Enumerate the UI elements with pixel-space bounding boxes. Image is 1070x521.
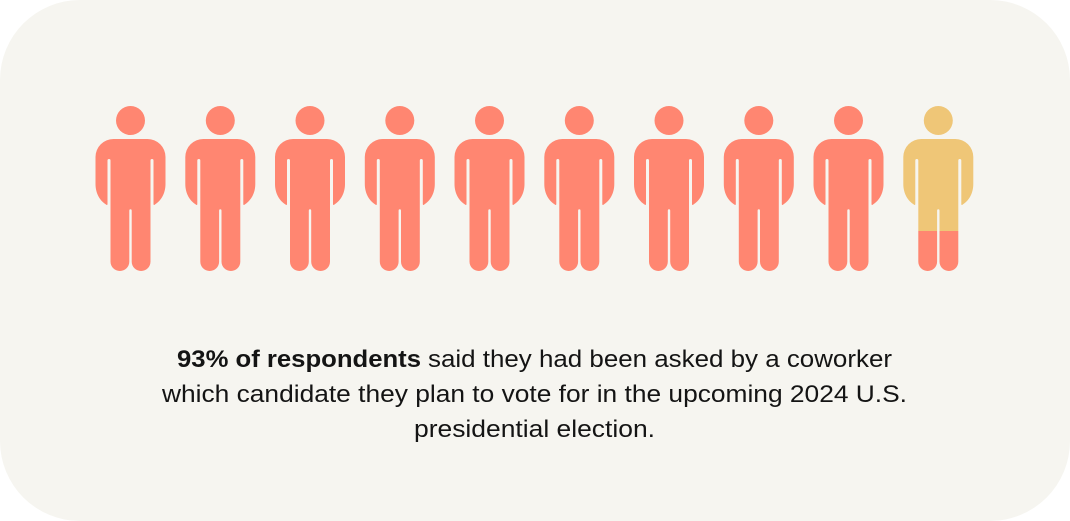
icon: person 5: [454, 106, 524, 271]
icon: person 6: [544, 106, 614, 271]
caption line 1: 93% of respondents: [177, 346, 421, 373]
icon: person 1: [96, 106, 166, 271]
icon: person 7: [634, 106, 704, 271]
icon: person 9: [814, 106, 884, 271]
text block: caption: [161, 346, 907, 443]
icon: person 3: [275, 106, 345, 271]
caption line 1: said they had been asked by a coworker: [428, 346, 892, 373]
icon: person 4: [365, 106, 435, 271]
icon: person 2: [185, 106, 255, 271]
pictogram row: ten people: [96, 106, 973, 271]
caption line 2: which candidate they plan to vote for in the upcoming 2024 U.S.: [161, 381, 907, 408]
caption line 1: [177, 346, 892, 373]
icon: person 8: [724, 106, 794, 271]
caption line 3: presidential election.: [414, 416, 655, 443]
icon: person 10, partly filled: [903, 106, 973, 271]
